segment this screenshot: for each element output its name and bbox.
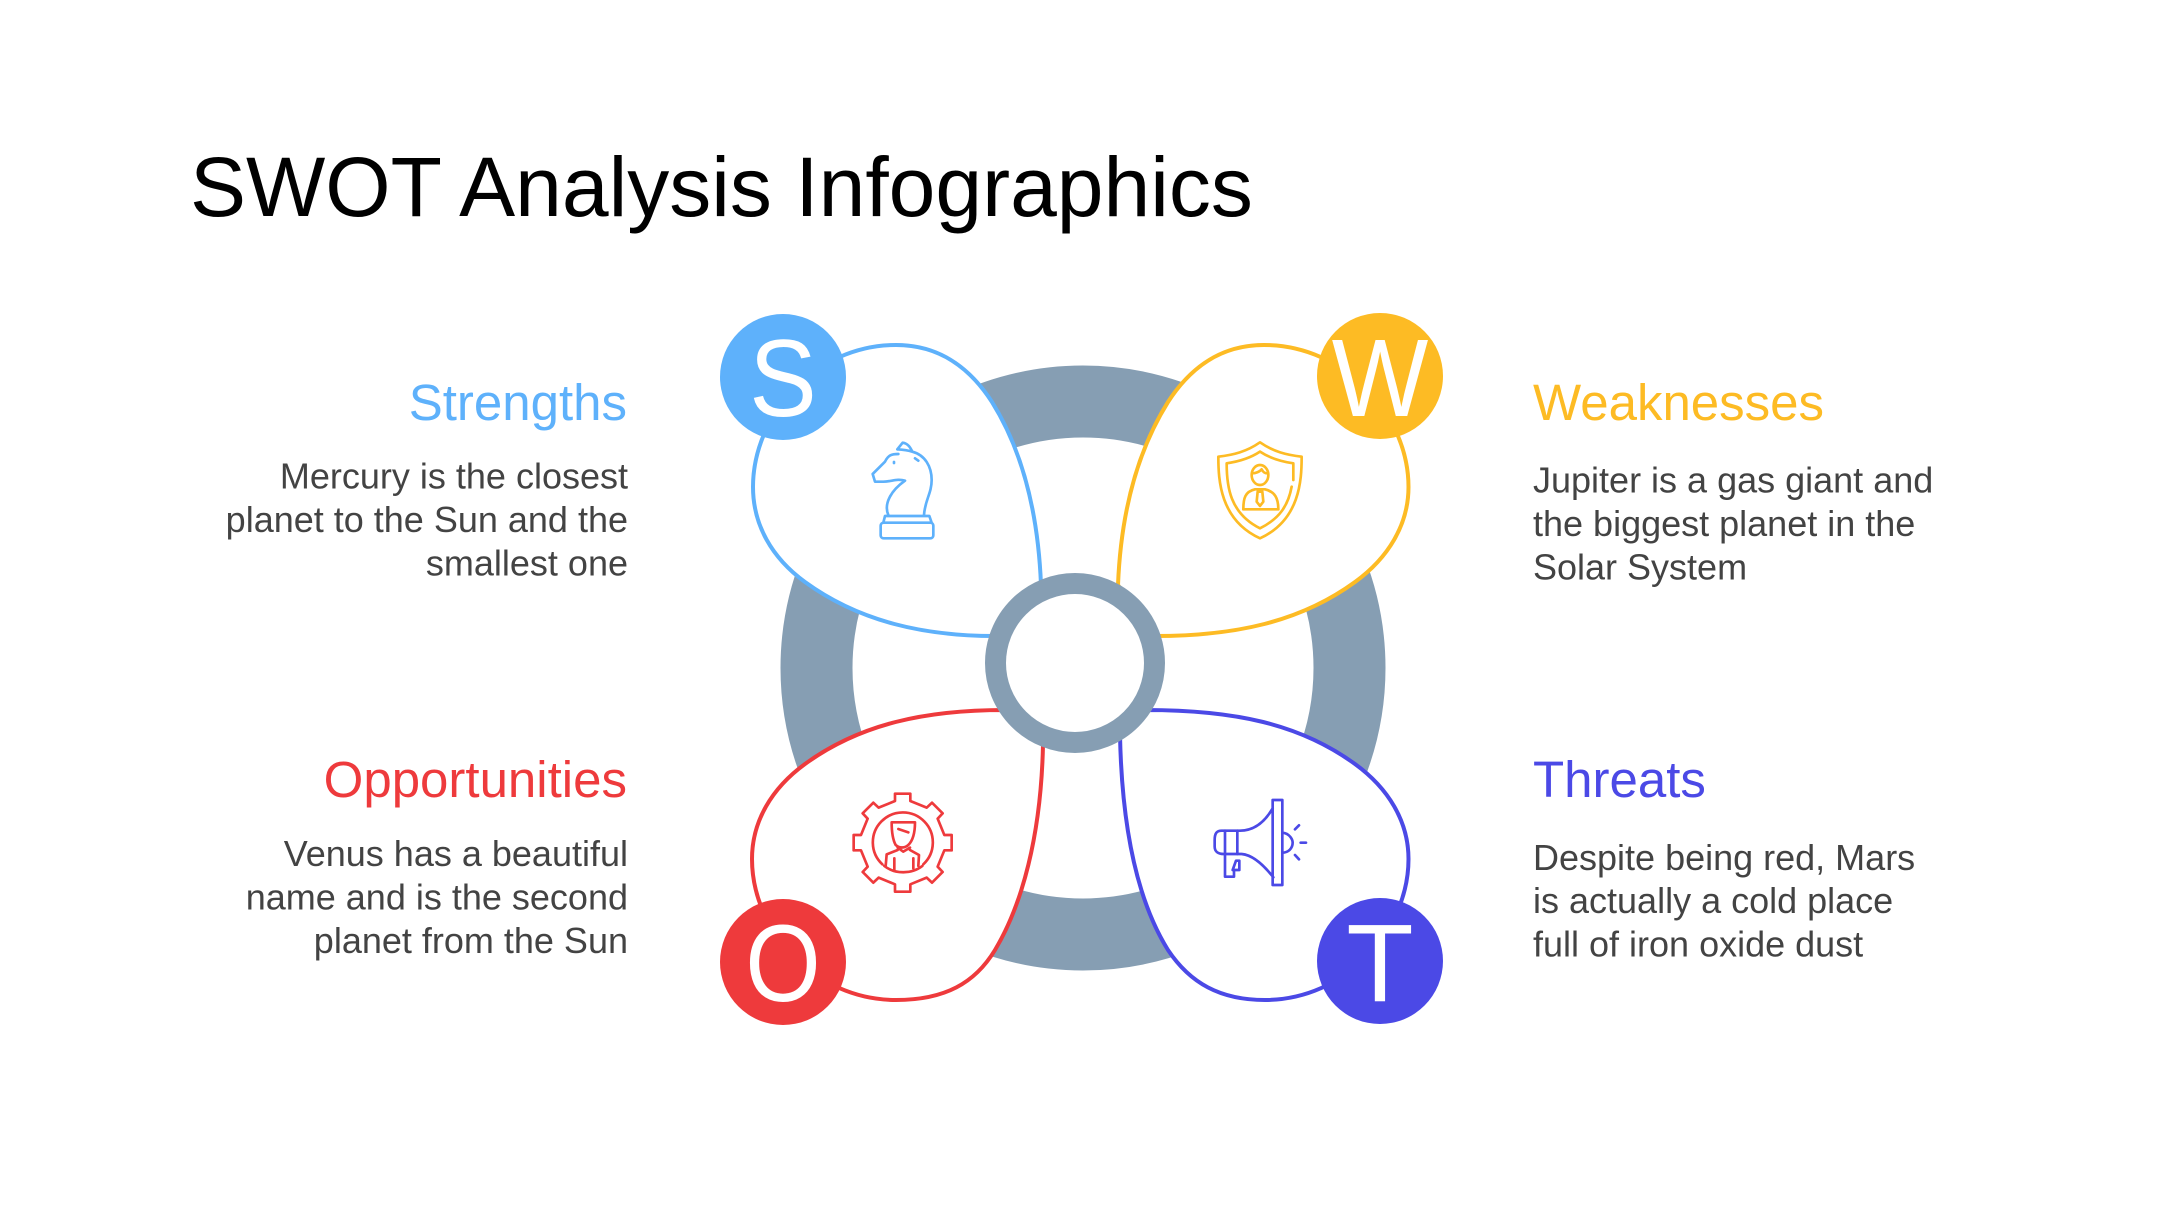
icon: gear with person xyxy=(854,794,952,892)
heading: Strengths: Strengths xyxy=(409,374,627,431)
text block: strengths: planet to the Sun and the xyxy=(226,499,628,540)
badge: T xyxy=(1317,898,1443,1025)
badge: O: O xyxy=(745,901,821,1024)
icon: chess knight xyxy=(873,443,933,538)
panel: weaknesses petal xyxy=(1118,345,1408,636)
text block: weaknesses: Jupiter is a gas giant and xyxy=(1533,460,1933,500)
panel: threats petal xyxy=(1120,710,1408,1000)
badge: W: W xyxy=(1332,317,1428,440)
text block: threats: Despite being red, Mars xyxy=(1533,837,1915,878)
text block: opportunities: Venus has a beautiful xyxy=(284,833,628,874)
text block: opportunities: name and is the second xyxy=(246,876,628,918)
centre ring xyxy=(996,584,1154,742)
text block: weaknesses: the biggest planet in the xyxy=(1533,503,1915,544)
text block: strengths: Mercury is the closest xyxy=(280,456,628,496)
panel: strengths petal xyxy=(753,345,1041,636)
outer ring xyxy=(816,402,1350,934)
icon: megaphone xyxy=(1215,800,1306,885)
heading: Threats: Threats xyxy=(1533,751,1706,808)
heading: Opportunities: Opportunities xyxy=(324,751,627,808)
heading: Weaknesses: Weaknesses xyxy=(1533,374,1824,431)
badge: T: T xyxy=(1346,902,1414,1025)
text block: opportunities: planet from the Sun xyxy=(314,920,628,961)
title: SWOT Analysis Infographics xyxy=(190,140,1253,234)
panel: opportunities petal xyxy=(752,710,1043,1000)
badge: S xyxy=(720,314,846,440)
text block: strengths: smallest one xyxy=(426,542,628,584)
text block: threats: full of iron oxide dust xyxy=(1533,924,1863,964)
text block: weaknesses: Solar System xyxy=(1533,546,1747,588)
text block: threats: is actually a cold place xyxy=(1533,880,1893,921)
icon: shield with person xyxy=(1218,442,1302,538)
badge: O xyxy=(720,899,846,1025)
badge: S: S xyxy=(749,317,817,440)
